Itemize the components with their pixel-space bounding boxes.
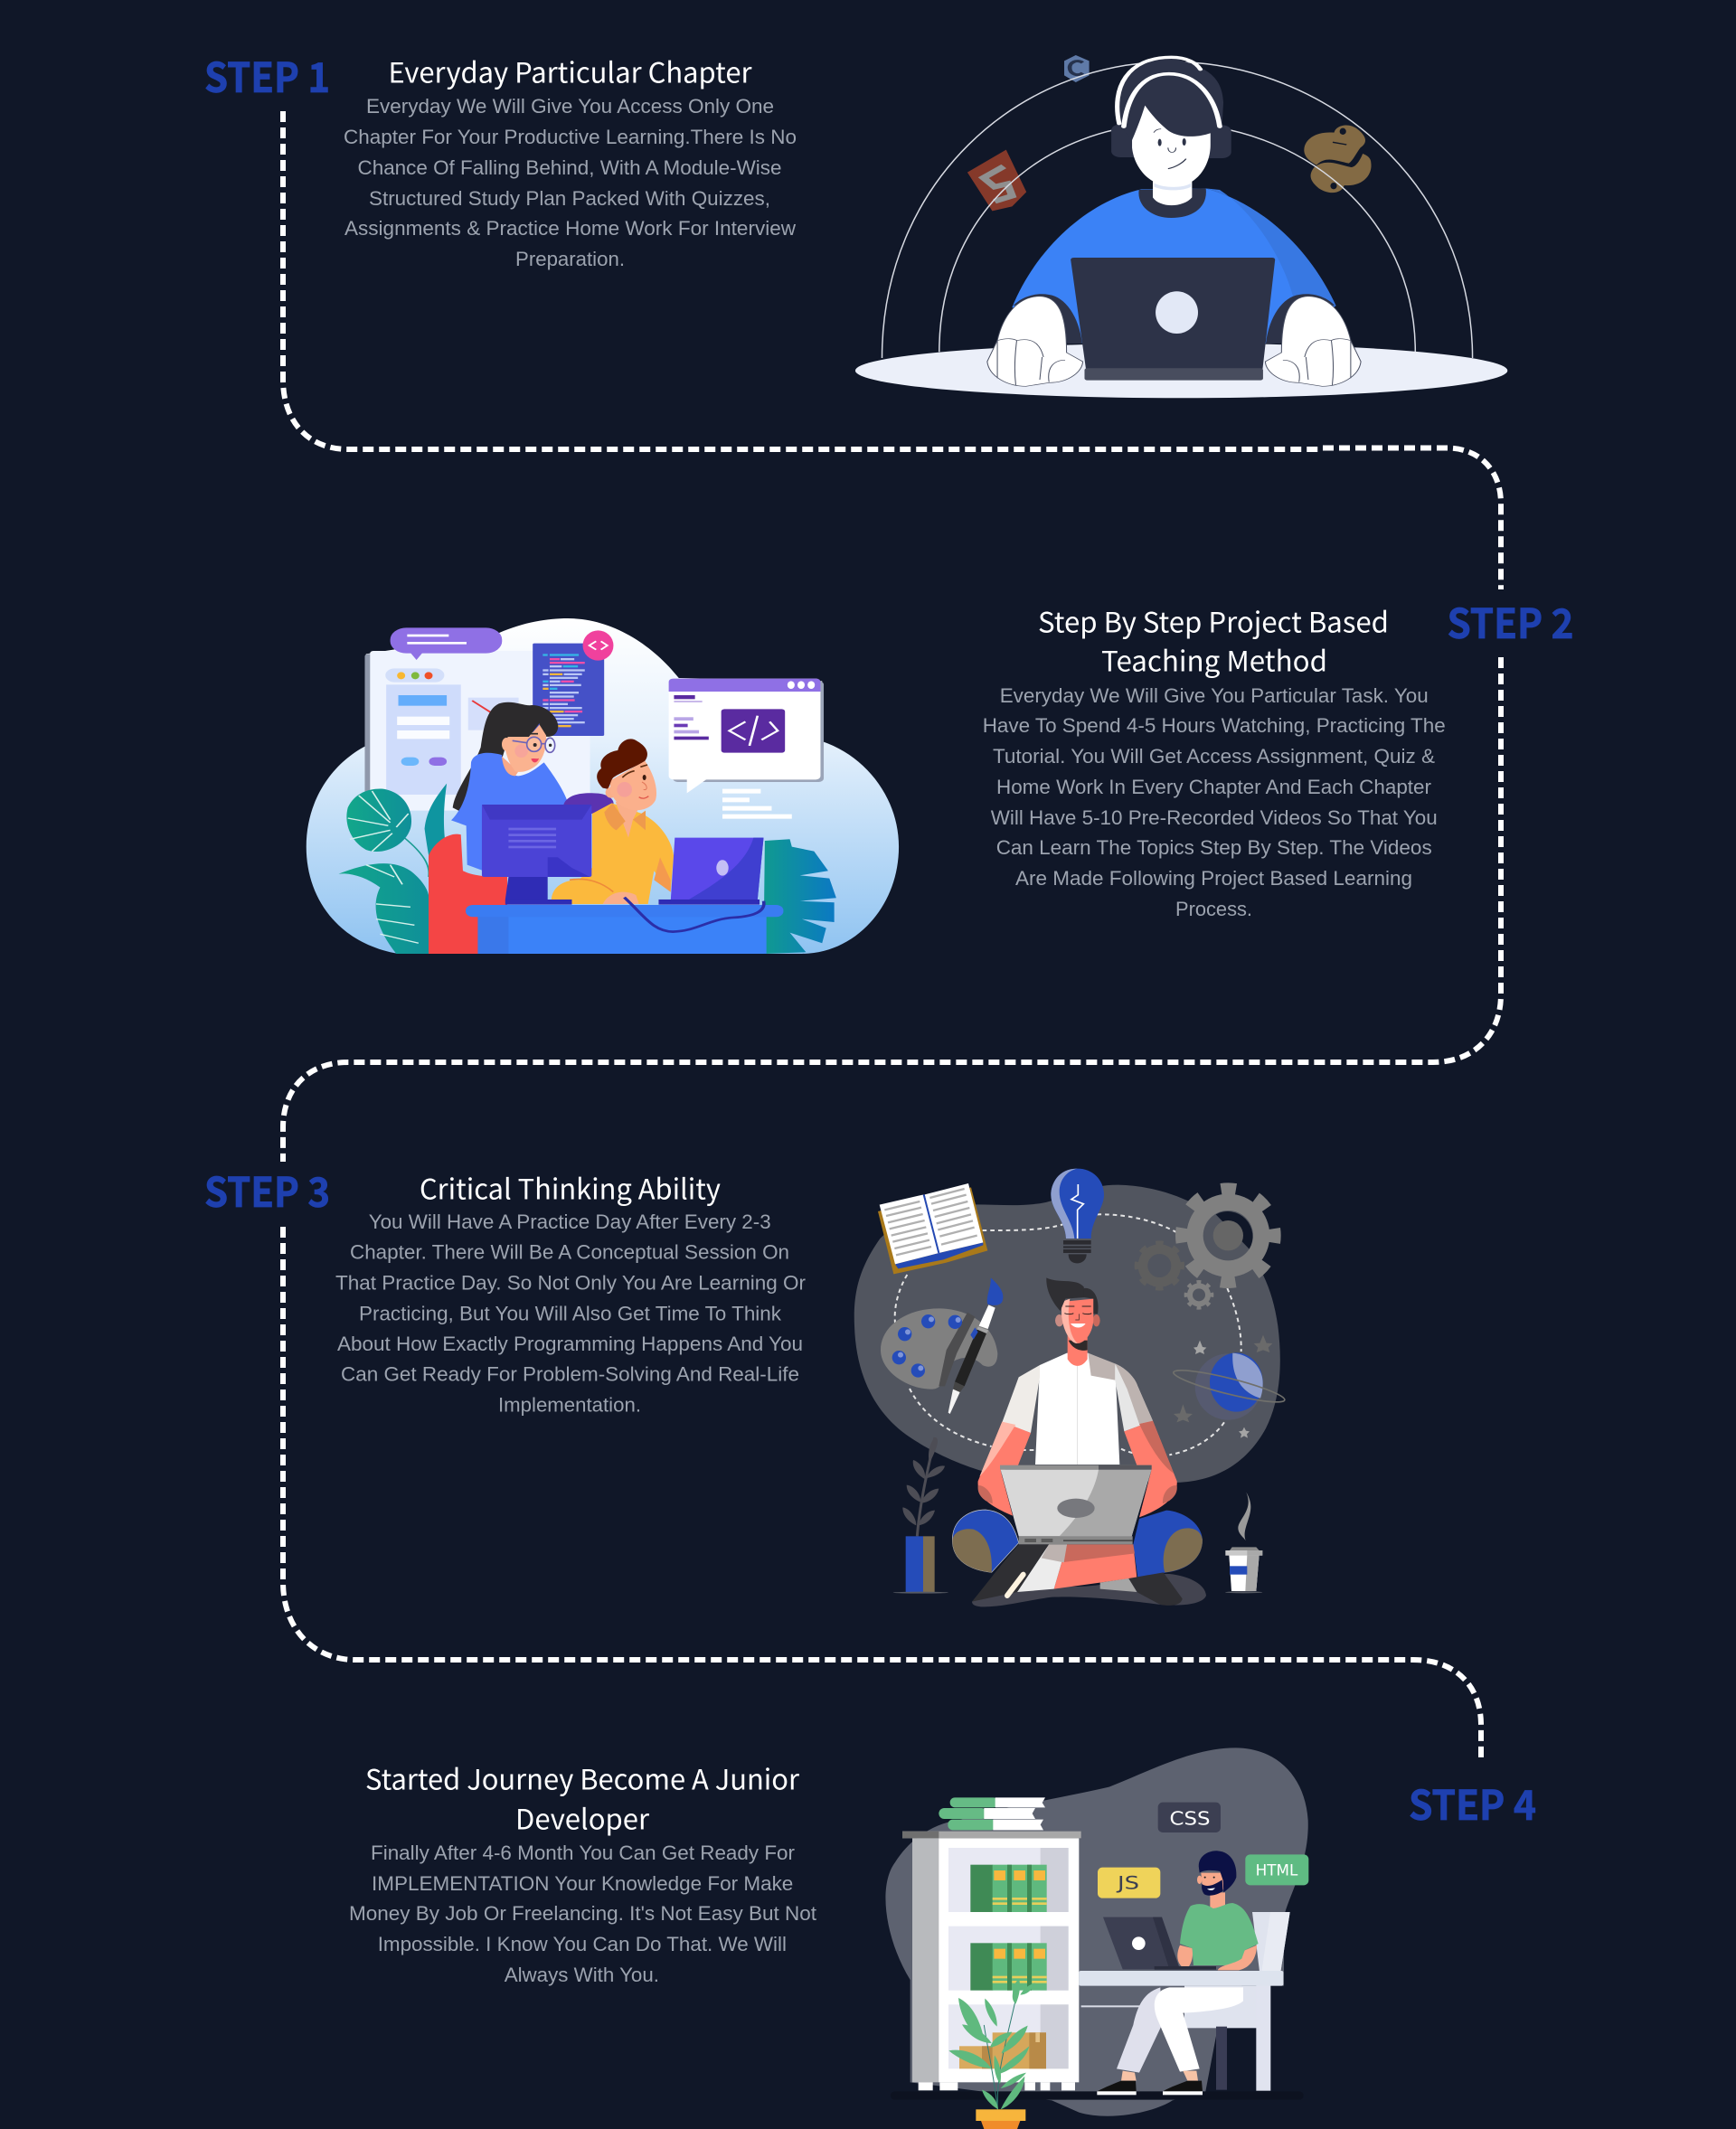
step 3 description: About How Exactly Programming Happens And You (337, 1333, 803, 1355)
step 2 description: Have To Spend 4-5 Hours Watching, Practicing The (983, 714, 1446, 737)
step 1 description: Structured Study Plan Packed With Quizzes, (369, 187, 770, 210)
illustration: developer with headphones and laptop (855, 55, 1507, 398)
person: shirt (1002, 1353, 1153, 1465)
step 3 description: Chapter. There Will Be A Conceptual Session On (350, 1241, 789, 1264)
man head (597, 739, 656, 810)
man shirt (552, 802, 674, 904)
step 1 description: Chance Of Falling Behind, With A Module-Wise (358, 156, 781, 179)
step 4 description: Impossible. I Know You Can Do That. We Will (378, 1933, 787, 1955)
step 1 description: Everyday We Will Give You Access Only One (366, 95, 774, 118)
man chair (563, 793, 614, 814)
laptop (1071, 258, 1275, 381)
step 2 description: Tutorial. You Will Get Access Assignment, Quiz & (993, 745, 1435, 768)
cable (625, 898, 764, 932)
step 2 heading: Teaching Method (1101, 638, 1327, 680)
hair (1118, 57, 1223, 140)
icon: book (878, 1183, 987, 1274)
chair (1184, 1912, 1290, 2090)
stars (1174, 1335, 1272, 1438)
woman top (451, 753, 568, 871)
boxes (959, 2032, 1046, 2068)
connector: dashed path step 1 to step 2 (283, 111, 1501, 589)
person: legs (952, 1510, 1206, 1606)
step 4 heading: Started Journey Become A Junior (365, 1757, 800, 1797)
laptop (1000, 1465, 1152, 1544)
icon: large gear (1183, 1191, 1273, 1281)
step 2 description: Home Work In Every Chapter And Each Chapter (996, 776, 1432, 798)
illustration: junior developer at desk (885, 1747, 1308, 2129)
speech bubble (391, 627, 502, 660)
laptop (1103, 1917, 1216, 1970)
facial features (1154, 129, 1186, 169)
step 2 label: STEP 2 (1447, 591, 1573, 650)
two people (451, 702, 674, 904)
background blob (885, 1747, 1308, 2116)
right arm and hand (1265, 294, 1361, 386)
face (1132, 102, 1211, 187)
woman face (502, 725, 555, 776)
cloud background and screens (307, 618, 899, 954)
step 4 label: STEP 4 (1409, 1773, 1536, 1832)
label: css (1158, 1803, 1221, 1832)
desktop monitor (482, 805, 591, 905)
icon: small gear (1186, 1282, 1212, 1307)
person: legs (1097, 1987, 1243, 2095)
icon: paint palette (881, 1308, 997, 1390)
step 1 description (344, 95, 797, 270)
step 2 description: Everyday We Will Give You Particular Task. You (1000, 684, 1429, 707)
step 2 heading: Step By Step Project Based (1038, 600, 1389, 640)
step 4 heading (365, 1757, 800, 1837)
neck (1153, 179, 1192, 205)
headphone band (1118, 57, 1220, 127)
connector: dashed path step 2 to step 3 (283, 657, 1501, 1162)
label: html (1245, 1854, 1308, 1885)
plant in pot (948, 1978, 1035, 2129)
icon: python (1304, 125, 1372, 193)
icon: paint brush (948, 1277, 1003, 1414)
step 2 heading (1038, 600, 1389, 680)
illustration: two developers in cloud (307, 618, 899, 954)
floor (891, 2091, 1304, 2100)
step 1 heading: Everyday Particular Chapter (389, 51, 752, 90)
icon: html5 (967, 150, 1026, 211)
monitor laptop and desk (466, 805, 783, 954)
text lines (722, 789, 792, 819)
headphone cups (1111, 124, 1231, 158)
step 3 description (335, 1211, 806, 1417)
step 4 description: Money By Job Or Freelancing. It's Not Easy But Not (349, 1902, 817, 1925)
step 4 description: IMPLEMENTATION Your Knowledge For Make (372, 1872, 793, 1895)
person: arms (978, 1421, 1177, 1517)
label: html: HTML (1256, 1861, 1298, 1879)
plant left (338, 784, 447, 954)
step 3 label: STEP 3 (204, 1160, 330, 1219)
code window (669, 679, 824, 793)
connector: dashed path step 3 to step 4 (283, 1227, 1481, 1758)
step 4 heading: Developer (515, 1797, 650, 1837)
step 2 description: Can Learn The Topics Step By Step. The Videos (996, 836, 1432, 859)
red skirt (429, 834, 507, 954)
label: css: CSS (1169, 1808, 1210, 1830)
cloud background (307, 618, 899, 954)
step 3 description: That Practice Day. So Not Only You Are Learning Or (335, 1272, 806, 1295)
books shelf 2 (970, 1943, 1047, 1991)
step 2 description: Are Made Following Project Based Learning (1015, 867, 1412, 890)
sweater shade (1206, 188, 1336, 306)
step 1 description: Preparation. (515, 248, 625, 270)
code panel (533, 644, 604, 736)
step 3 description: Practicing, But You Will Also Get Time To Think (359, 1303, 782, 1325)
step 3 description: You Will Have A Practice Day After Every 2-3 (369, 1211, 771, 1233)
man hand (603, 892, 639, 904)
step 1 label: STEP 1 (204, 45, 330, 104)
bookshelf (902, 1832, 1081, 2090)
icon: planet (1172, 1352, 1287, 1420)
left screen (364, 651, 590, 812)
sweater (1012, 188, 1336, 344)
stack of books (939, 1797, 1045, 1830)
potted plant (893, 1437, 948, 1594)
neck shadow (1155, 184, 1191, 190)
icon: medium gear (1137, 1244, 1181, 1287)
person: torso and head (1177, 1851, 1259, 1970)
icon: c language (1064, 55, 1090, 82)
woman hair back (453, 702, 558, 816)
step 1 description: Chapter For Your Productive Learning.There Is No (344, 126, 797, 148)
step 3 description: Can Get Ready For Problem-Solving And Real-Life (341, 1363, 799, 1386)
books shelf 1 (970, 1865, 1047, 1912)
collar (1138, 188, 1206, 218)
illustration: meditating thinker with ideas (854, 1169, 1287, 1606)
desk (466, 905, 783, 954)
plant right (764, 839, 836, 954)
step 3 description: Implementation. (498, 1394, 641, 1417)
inner arc (939, 124, 1415, 352)
step 4 description: Finally After 4-6 Month You Can Get Ready For (371, 1842, 796, 1864)
dashed idea loop (895, 1214, 1241, 1455)
background blob (854, 1185, 1280, 1483)
label: js: JS (1117, 1872, 1139, 1893)
left arm and hand (987, 294, 1082, 386)
step 3 heading: Critical Thinking Ability (420, 1166, 721, 1208)
code badge (583, 630, 613, 661)
step 4 description: Always With You. (505, 1964, 659, 1986)
step 1 description: Assignments & Practice Home Work For Interview (344, 217, 797, 240)
step 2 description: Will Have 5-10 Pre-Recorded Videos So That You (991, 806, 1438, 829)
laptop (658, 838, 764, 905)
person: head and neck (1046, 1277, 1100, 1366)
desk (1079, 1971, 1283, 2091)
step 4 description (349, 1842, 817, 1986)
step 2 description (983, 684, 1446, 920)
coffee cup (1225, 1493, 1262, 1593)
table (855, 344, 1507, 398)
label: js (1098, 1868, 1160, 1898)
outer arc (882, 61, 1473, 358)
icon: light bulb (1051, 1169, 1104, 1263)
step 2 description: Process. (1175, 898, 1252, 920)
